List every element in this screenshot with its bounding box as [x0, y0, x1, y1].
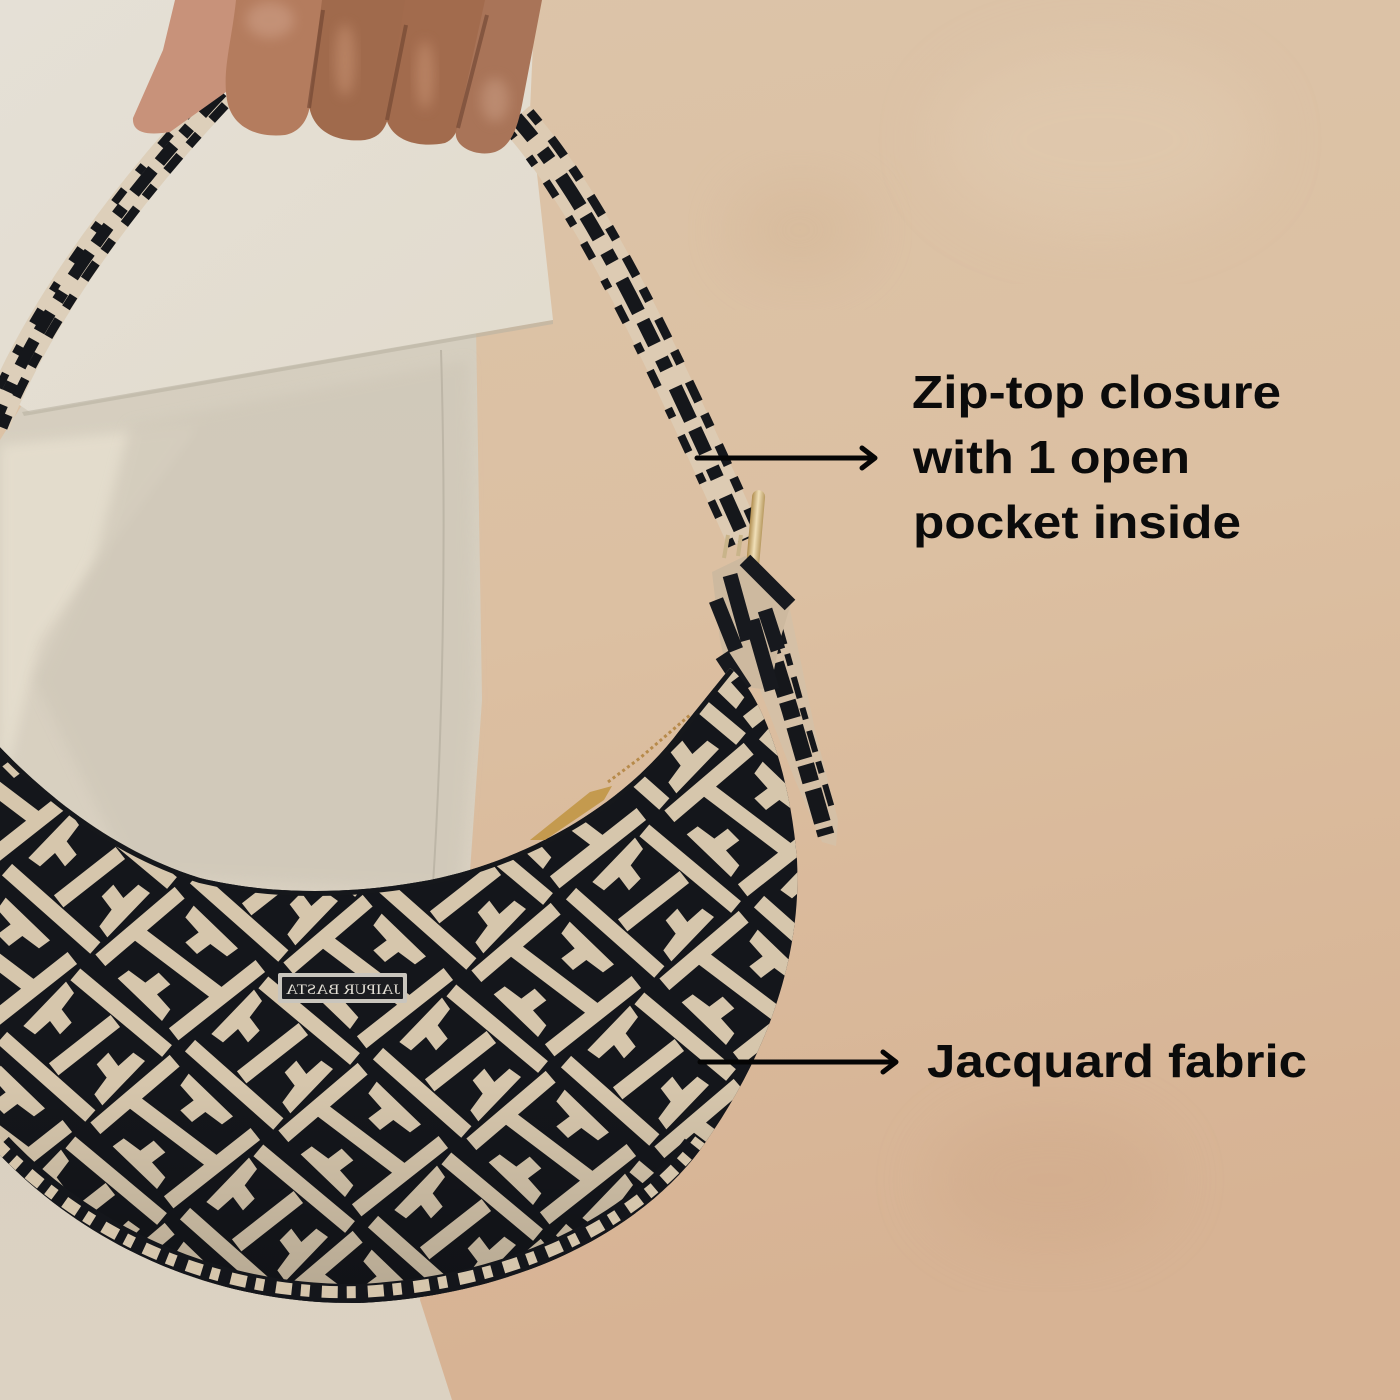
bag strap: left section	[0, 86, 232, 428]
hand gripping the strap	[133, 0, 542, 153]
arrow: to zip-top closure	[697, 448, 875, 468]
metal ring hardware	[724, 490, 766, 572]
brand plate: JAIPUR BASTA	[286, 982, 400, 998]
callout: zip-top closure: Zip-top closure	[912, 366, 1281, 418]
zip edge	[0, 668, 730, 891]
bottom seam band	[0, 1140, 700, 1303]
callout: zip-top closure: pocket inside	[913, 496, 1241, 548]
callout: zip-top closure: with 1 open	[912, 431, 1190, 483]
arrow: to jacquard fabric	[700, 1052, 896, 1072]
brand plate	[278, 973, 407, 1003]
geometric woven pattern	[0, 668, 798, 1303]
shirt	[0, 0, 553, 416]
bag strap loop	[712, 556, 792, 690]
gold zipper pull	[530, 715, 690, 840]
callout: jacquard fabric: Jacquard fabric	[927, 1035, 1307, 1087]
jacquard bag body	[0, 668, 798, 1303]
callout: zip-top closure	[912, 366, 1281, 548]
bag adjuster tail	[742, 575, 838, 846]
bag strap: right section	[503, 112, 758, 546]
trousers	[0, 325, 482, 1400]
